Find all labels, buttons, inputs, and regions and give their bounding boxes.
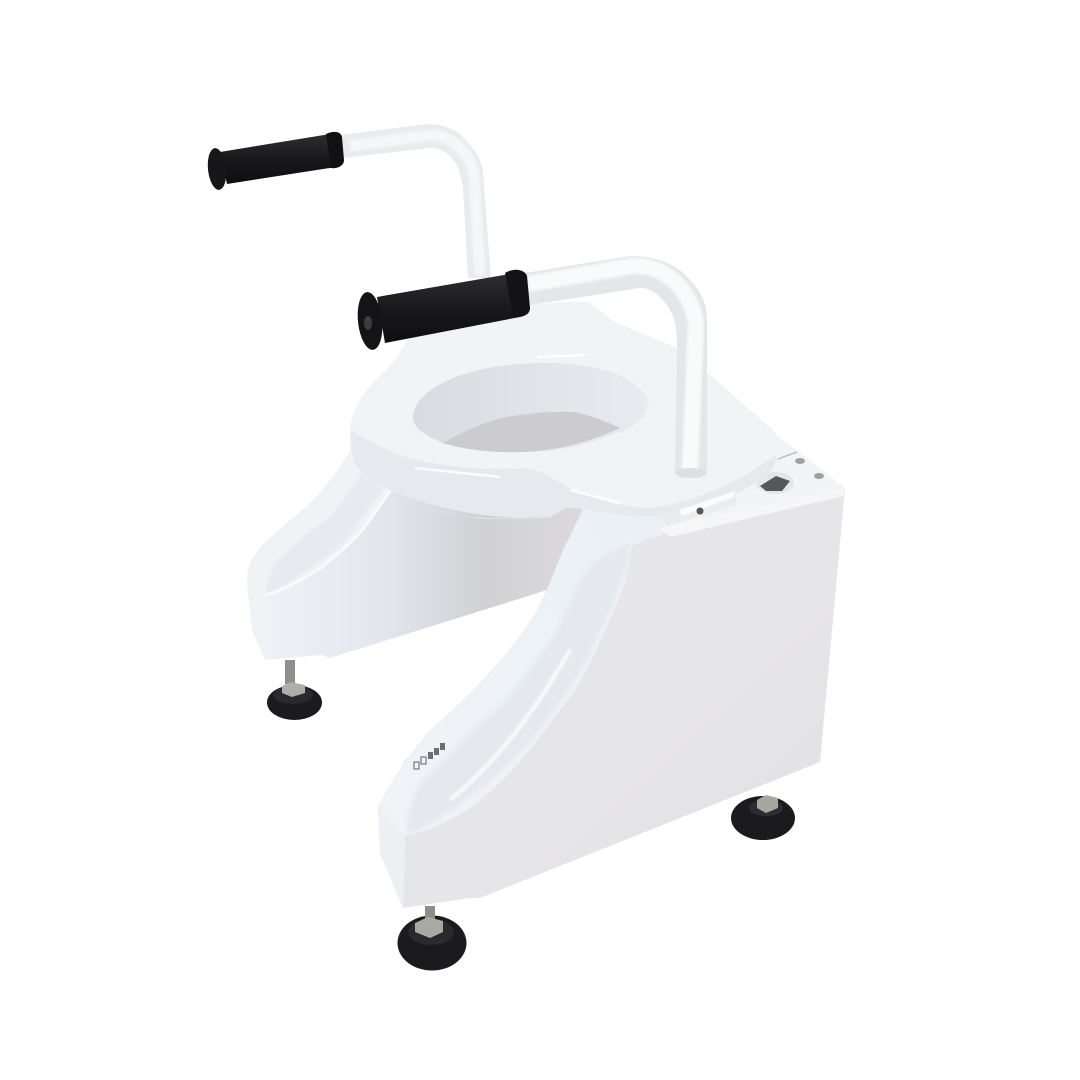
block top surface	[650, 430, 845, 533]
right block shoulder	[378, 505, 670, 908]
seat opening	[413, 363, 648, 452]
base: left block	[247, 448, 590, 660]
near grip	[355, 270, 530, 351]
left block shoulder	[247, 448, 392, 660]
right block channel	[407, 543, 630, 835]
foot: front	[398, 906, 466, 970]
near armrest	[355, 256, 707, 478]
seat rim side band	[350, 430, 776, 518]
foot: rear left	[267, 660, 322, 720]
control icons on front block	[414, 743, 445, 769]
rocker switch and screws	[756, 458, 824, 494]
far armrest	[206, 124, 491, 278]
seat	[350, 302, 779, 519]
foot: rear right	[731, 795, 795, 840]
far grip	[206, 132, 344, 191]
hinge bracket	[655, 491, 736, 526]
base: right block	[378, 430, 845, 908]
